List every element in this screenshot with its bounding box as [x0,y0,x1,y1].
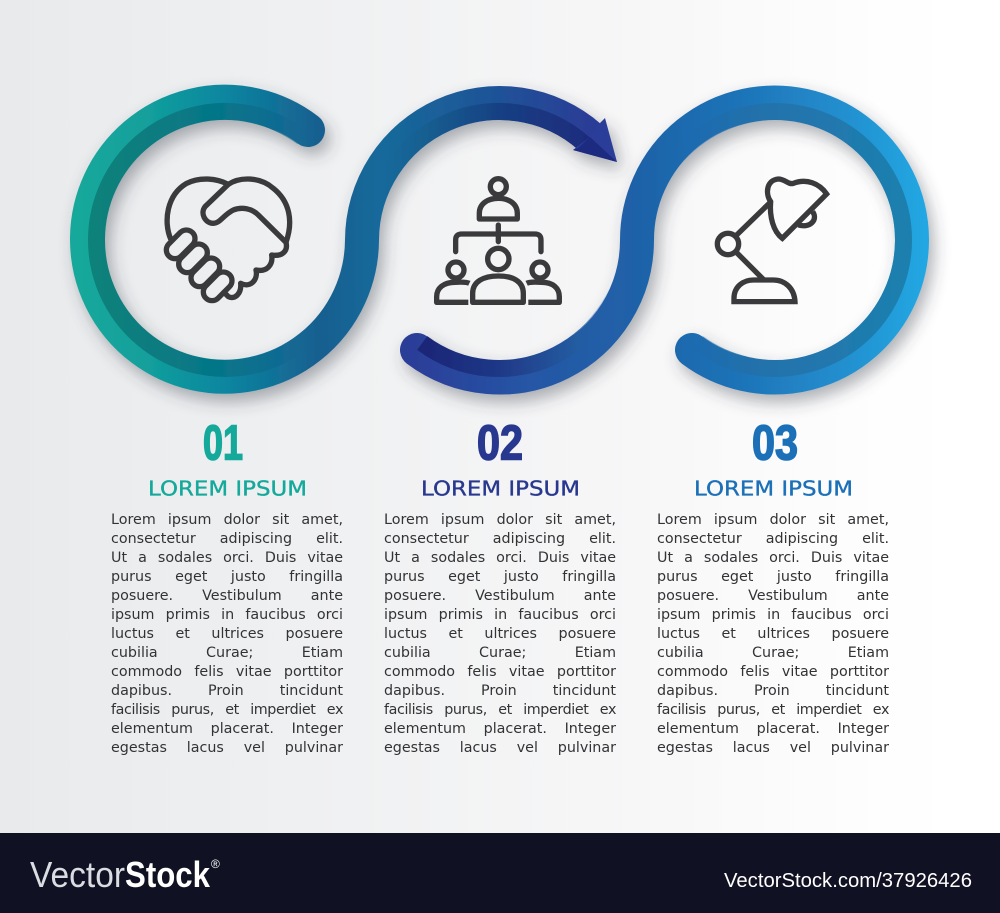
text block 1: ipsum primis in faucibus orci [111,607,343,623]
heading 1: LOREM IPSUM [148,476,307,500]
icon: desk lamp [717,179,827,302]
text block 2 [384,512,616,756]
text block 1: luctus et ultrices posuere [111,626,343,642]
text block 2: Ut a sodales orci. Duis vitae [384,550,616,566]
text block 1: elementum placerat. Integer [111,721,343,737]
text block 3: egestas lacus vel pulvinar [657,740,889,756]
icon: team hierarchy [437,179,559,302]
logo word: Stock: Stock [125,854,211,895]
text block 1: dapibus. Proin tincidunt [111,683,343,699]
text block 1: cubilia Curae; Etiam [111,645,343,661]
logo word: Vector: Vector [30,854,125,895]
text block 1: egestas lacus vel pulvinar [111,740,343,756]
loop 1 ribbon: teal circle flowing into arrow over circle 2 [87,102,617,377]
text block 3: facilisis purus, et imperdiet ex [657,702,889,718]
text block 3: ipsum primis in faucibus orci [657,607,889,623]
arrow head [573,118,617,162]
text block 2: egestas lacus vel pulvinar [384,740,616,756]
loop 2 ribbon: blue circle flowing into circle 3 [417,102,912,378]
image id url: VectorStock.com/37926426 [724,870,972,892]
text block 2: luctus et ultrices posuere [384,626,616,642]
text block 1: Ut a sodales orci. Duis vitae [111,550,343,566]
number 03: 03 [752,416,798,470]
text block 3: dapibus. Proin tincidunt [657,683,889,699]
text block 2: Lorem ipsum dolor sit amet, [384,512,616,528]
text block 2: commodo felis vitae porttitor [384,664,616,680]
text block 2: facilisis purus, et imperdiet ex [384,702,616,718]
text block 3: commodo felis vitae porttitor [657,664,889,680]
heading 2: LOREM IPSUM [421,476,580,500]
text block 3: purus eget justo fringilla [657,569,889,585]
text block 2: purus eget justo fringilla [384,569,616,585]
text block 2: dapibus. Proin tincidunt [384,683,616,699]
text block 1: commodo felis vitae porttitor [111,664,343,680]
text block 2: posuere. Vestibulum ante [384,588,616,604]
text block 1: Lorem ipsum dolor sit amet, [111,512,343,528]
text block 3: consectetur adipiscing elit. [657,531,889,547]
text block 2: consectetur adipiscing elit. [384,531,616,547]
text block 1: consectetur adipiscing elit. [111,531,343,547]
icon: handshake heart [163,179,290,304]
footer bar [0,833,1000,913]
number 01: 01 [203,416,243,470]
heading 3: LOREM IPSUM [694,476,853,500]
text block 2: cubilia Curae; Etiam [384,645,616,661]
number 02: 02 [477,416,523,470]
text block 3: elementum placerat. Integer [657,721,889,737]
registered mark: ® [211,857,220,871]
text block 2: elementum placerat. Integer [384,721,616,737]
text block 1: purus eget justo fringilla [111,569,343,585]
text block 1: facilisis purus, et imperdiet ex [111,702,343,718]
text block 1 [111,512,343,756]
text block 3: Ut a sodales orci. Duis vitae [657,550,889,566]
text block 3: cubilia Curae; Etiam [657,645,889,661]
text block 3: luctus et ultrices posuere [657,626,889,642]
text block 3 [657,512,889,756]
text block 1: posuere. Vestibulum ante [111,588,343,604]
text block 2: ipsum primis in faucibus orci [384,607,616,623]
text block 3: posuere. Vestibulum ante [657,588,889,604]
text block 3: Lorem ipsum dolor sit amet, [657,512,889,528]
